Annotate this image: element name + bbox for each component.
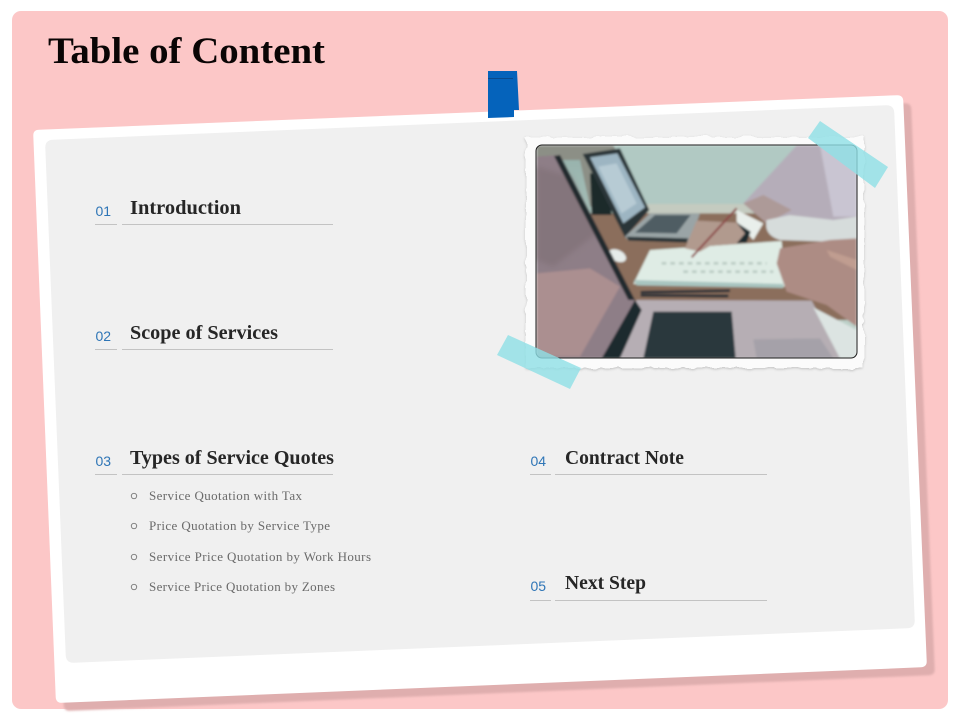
- sub-list of service quote types: Service Price Quotation by Work Hours: [149, 549, 371, 564]
- item 02: Scope of Services: 02: [96, 328, 111, 344]
- item 05: Next Step: Next Step: [565, 572, 646, 594]
- grey inner panel: [45, 105, 915, 663]
- item 04: Contract Note: Contract Note: [565, 447, 684, 469]
- item 05: Next Step: 05: [530, 578, 546, 594]
- photo: laptops and hands on a desk: [537, 145, 857, 359]
- item 01: Introduction: Introduction: [130, 197, 241, 219]
- sub-list of service quote types: Price Quotation by Service Type: [149, 518, 330, 533]
- sub-list of service quote types: Service Quotation with Tax: [149, 488, 302, 503]
- cyan tape top right: [808, 121, 888, 188]
- torn-edge photo frame: [526, 137, 864, 368]
- item 03: Types of Service Quotes: [95, 447, 371, 594]
- sub-list of service quote types: Service Price Quotation by Zones: [149, 579, 335, 594]
- item 05: Next Step: [530, 572, 767, 600]
- item 03: Types of Service Quotes: Types of Service Quotes: [130, 447, 334, 469]
- item 04: Contract Note: [530, 447, 767, 474]
- item 01: Introduction: 01: [96, 203, 111, 219]
- card shadow: [41, 103, 935, 711]
- item 02: Scope of Services: Scope of Services: [130, 322, 278, 344]
- cyan tape bottom left: [497, 335, 581, 389]
- item 01: Introduction: [95, 197, 333, 224]
- blue binder clip: [488, 71, 519, 118]
- item 02: Scope of Services: [95, 322, 333, 350]
- photo border: [536, 145, 857, 358]
- sub-list of service quote types: [131, 488, 371, 594]
- item 04: Contract Note: 04: [530, 453, 546, 469]
- title: Table of Content: [48, 31, 326, 72]
- white tilted card: [33, 95, 927, 703]
- item 03: Types of Service Quotes: 03: [96, 453, 111, 469]
